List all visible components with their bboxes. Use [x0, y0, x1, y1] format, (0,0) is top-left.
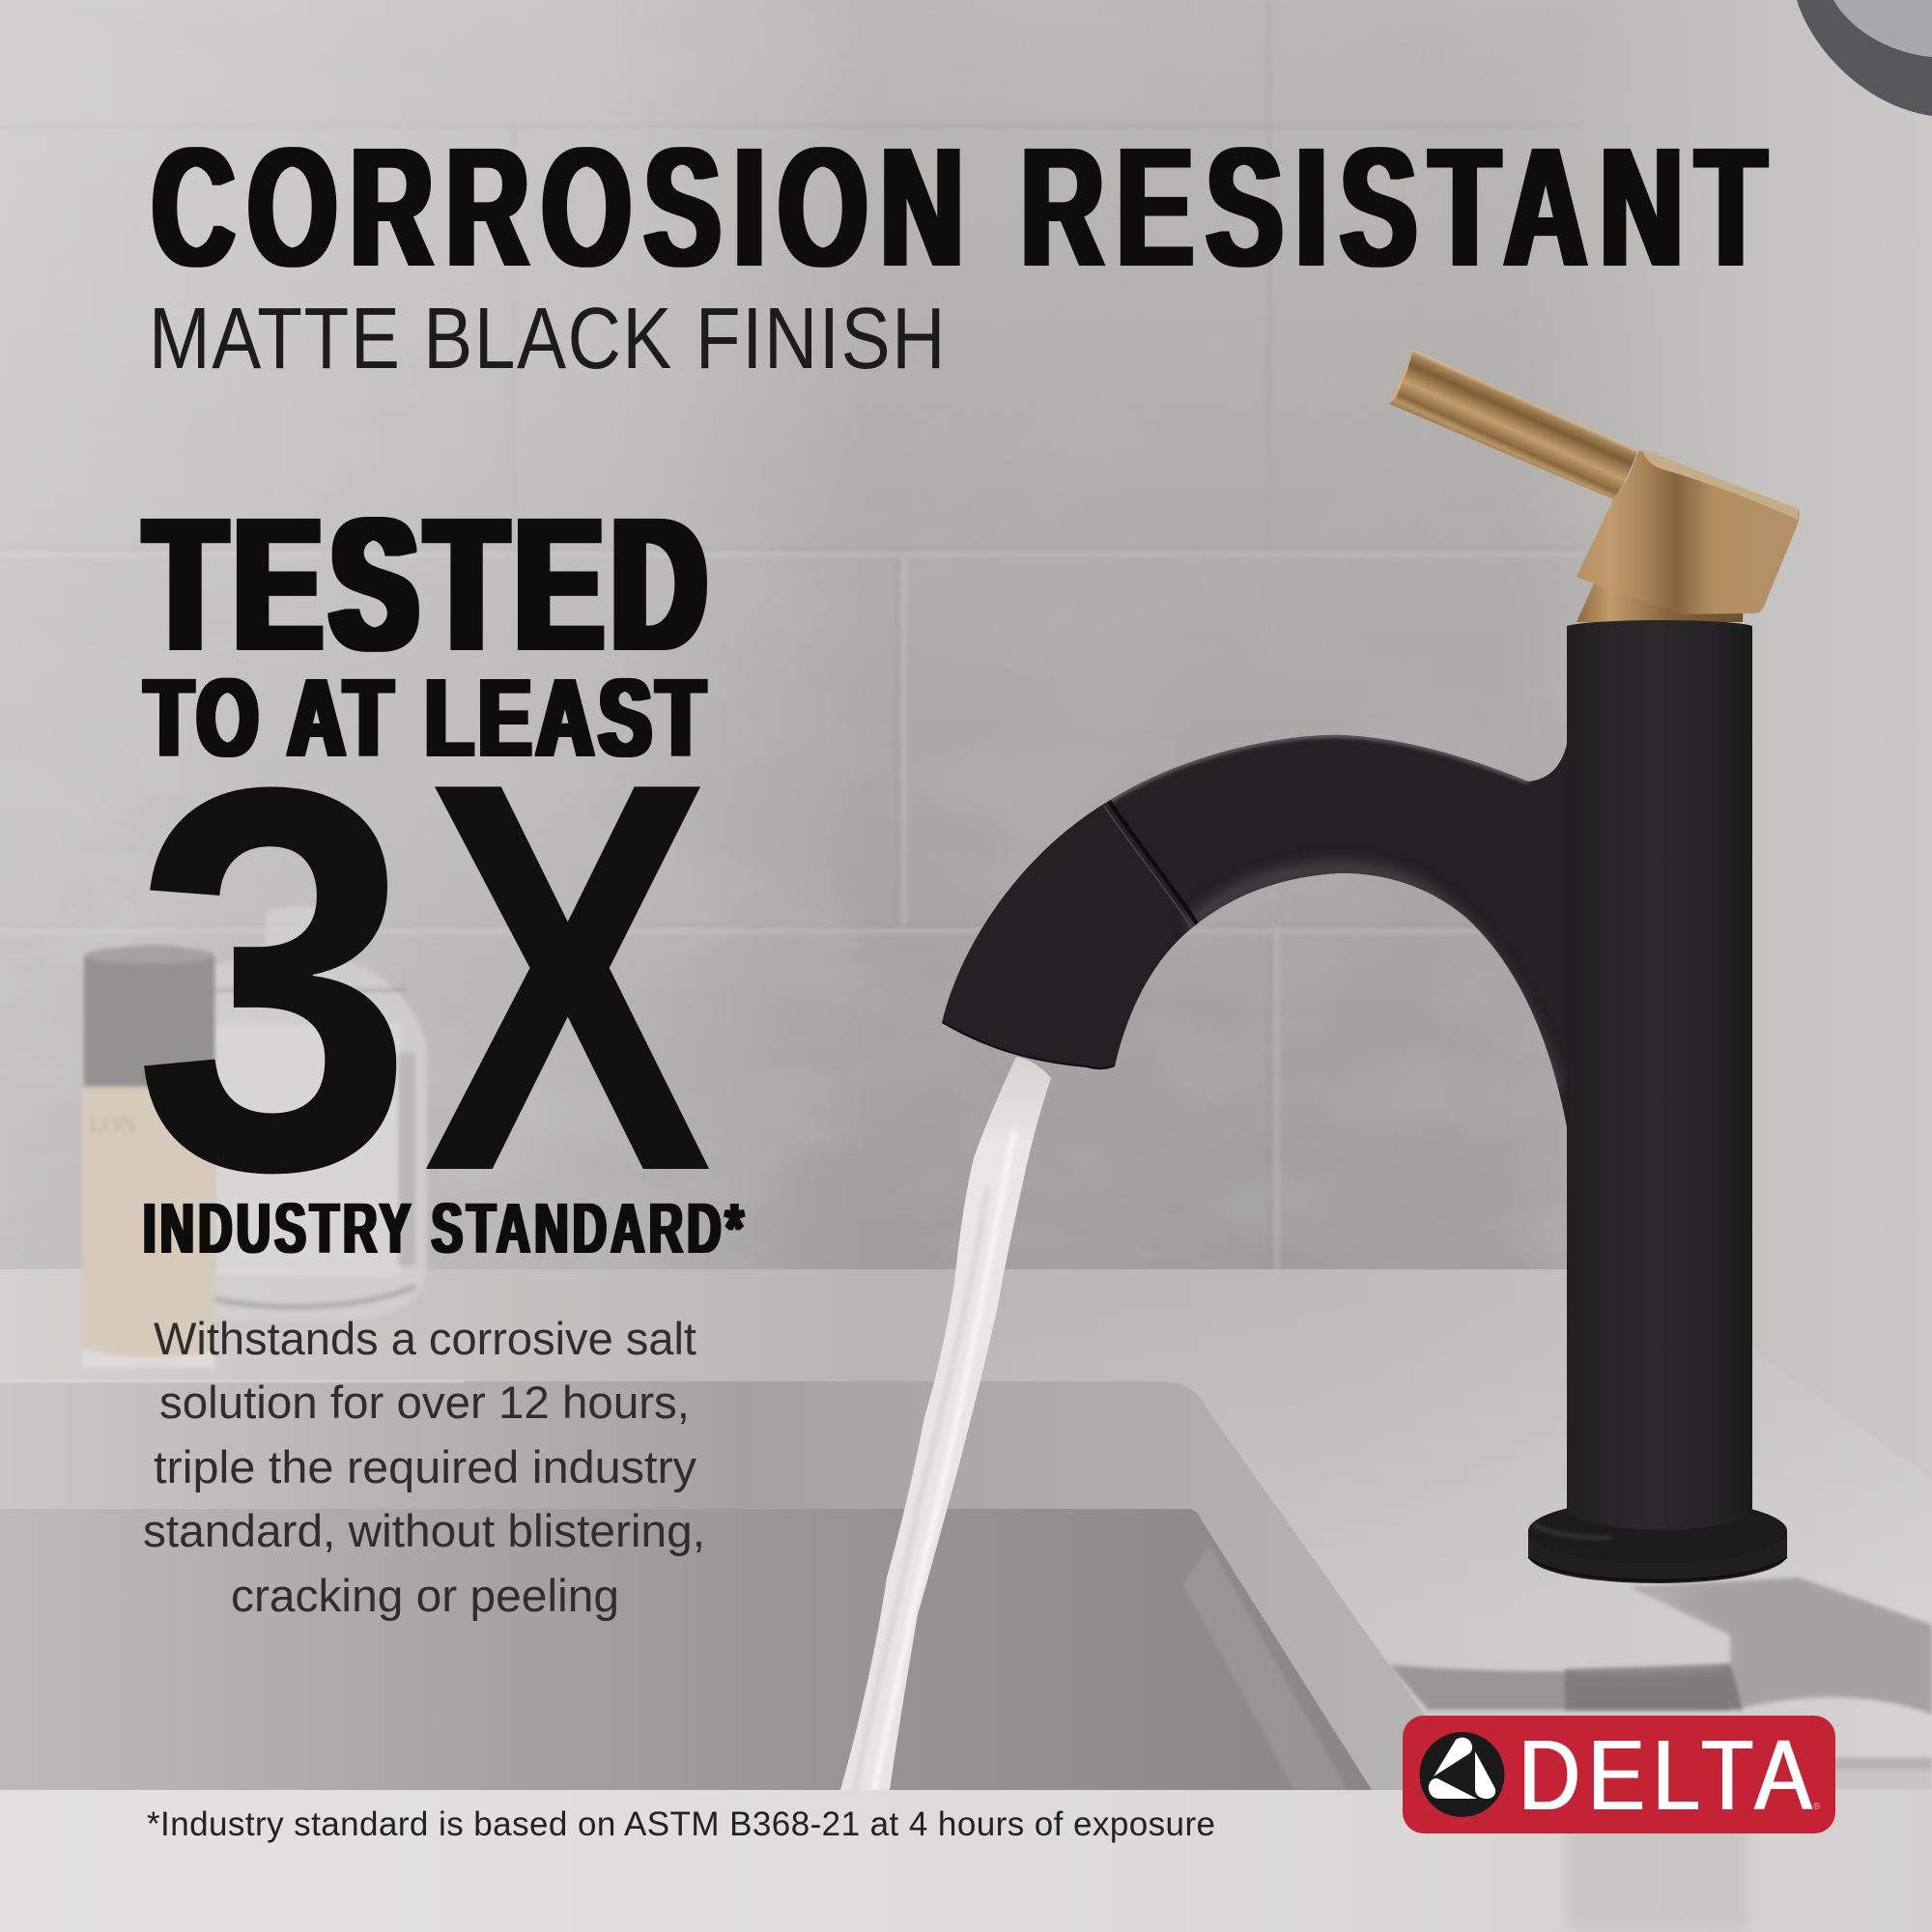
- subtitle: MATTE BLACK FINISH: [149, 289, 946, 386]
- text block: description: triple the required industry: [154, 1441, 697, 1492]
- heading: industry standard: INDUSTRY STANDARD*: [143, 1189, 744, 1269]
- panel: countertop: [0, 1269, 1932, 1790]
- faucet base flange: [1528, 1499, 1787, 1583]
- logo wordmark: DELTA: [1519, 1720, 1812, 1832]
- heading: to at least: TO AT LEAST: [145, 657, 705, 779]
- icon: water stream: [840, 1057, 1051, 1790]
- text block: description: solution for over 12 hours,: [159, 1377, 690, 1428]
- text block: description: Withstands a corrosive salt: [154, 1313, 696, 1364]
- big number: 3X: X: [422, 666, 715, 1287]
- heading: tested: TESTED: [146, 481, 706, 689]
- title: CORROSION RESISTANT: [152, 112, 1766, 301]
- icon: gold faucet handle: [1389, 350, 1800, 622]
- icon: blurred foundation bottle: [82, 946, 214, 1368]
- text block: description: standard, without blistering,: [143, 1505, 705, 1556]
- footnote: *Industry standard is based on ASTM B368-21 at 4 hours of exposure: [147, 1805, 1215, 1843]
- registered mark: ®: [1813, 1802, 1821, 1812]
- icon: blurred foundation bottle: LON: [89, 1113, 136, 1138]
- icon: blurred glass jar: [214, 906, 427, 1321]
- big number: 3X: [132, 666, 715, 1287]
- faucet spout: [942, 734, 1567, 1127]
- faucet column: [1567, 620, 1752, 1530]
- icon: mirror at top right: [1797, 0, 1932, 116]
- panel: tiled wall background: [0, 0, 1932, 1294]
- panel: side wall: [1507, 0, 1932, 1479]
- text block: description: [143, 1313, 705, 1621]
- icon: Delta triangle mark: [1420, 1732, 1505, 1817]
- logo: Delta: [1403, 1716, 1835, 1833]
- big number: 3X: 3: [132, 673, 414, 1284]
- panel: faucet shadow on counter: [1389, 1577, 1932, 1790]
- icon: matte black faucet: [942, 620, 1787, 1583]
- text block: description: cracking or peeling: [231, 1570, 619, 1621]
- panel: sink basin: [0, 1381, 1478, 1790]
- panel: bottom light band: [0, 1790, 1932, 1932]
